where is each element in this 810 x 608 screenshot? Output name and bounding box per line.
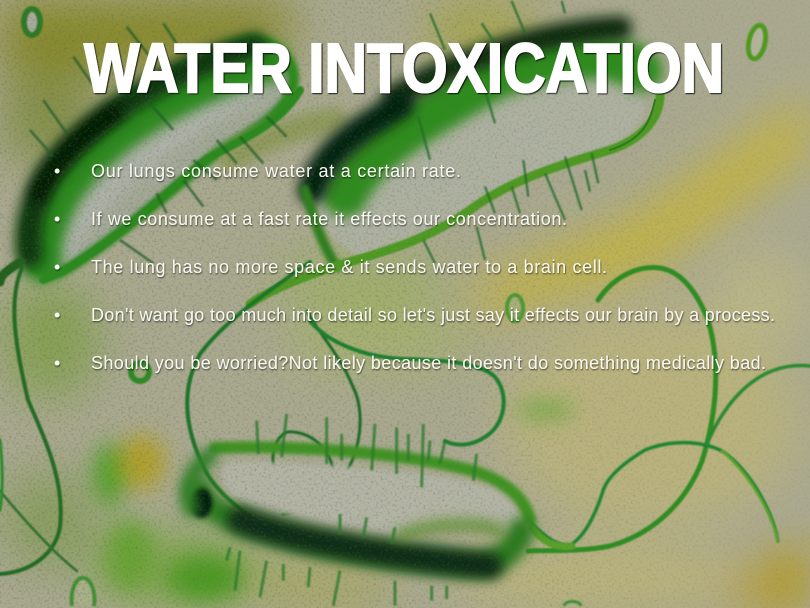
bullet 1: • bbox=[54, 161, 60, 181]
bullet 5: • bbox=[54, 353, 60, 373]
bullet 5: Should you be worried?Not likely because it doesn't do something medically bad. bbox=[91, 353, 766, 373]
bullet 2: • bbox=[54, 209, 60, 229]
body: upper left bbox=[26, 40, 335, 280]
bullet 4: Don't want go too much into detail so let's just say it effects our brain by a process. bbox=[91, 305, 775, 325]
tendrils bbox=[0, 262, 810, 574]
green and yellow soft patches bbox=[93, 402, 575, 600]
hairs bbox=[30, 1, 598, 606]
bullet 4: • bbox=[54, 305, 60, 325]
body: lower bbox=[188, 447, 530, 566]
bullet 2: If we consume at a fast rate it effects our concentration. bbox=[91, 209, 567, 229]
bullet 3: • bbox=[54, 257, 60, 277]
bullet 3: The lung has no more space & it sends water to a brain cell. bbox=[91, 257, 607, 277]
body: upper right bbox=[250, 28, 660, 304]
bullet list bbox=[54, 161, 775, 373]
bullet 1: Our lungs consume water at a certain rate. bbox=[91, 161, 461, 181]
